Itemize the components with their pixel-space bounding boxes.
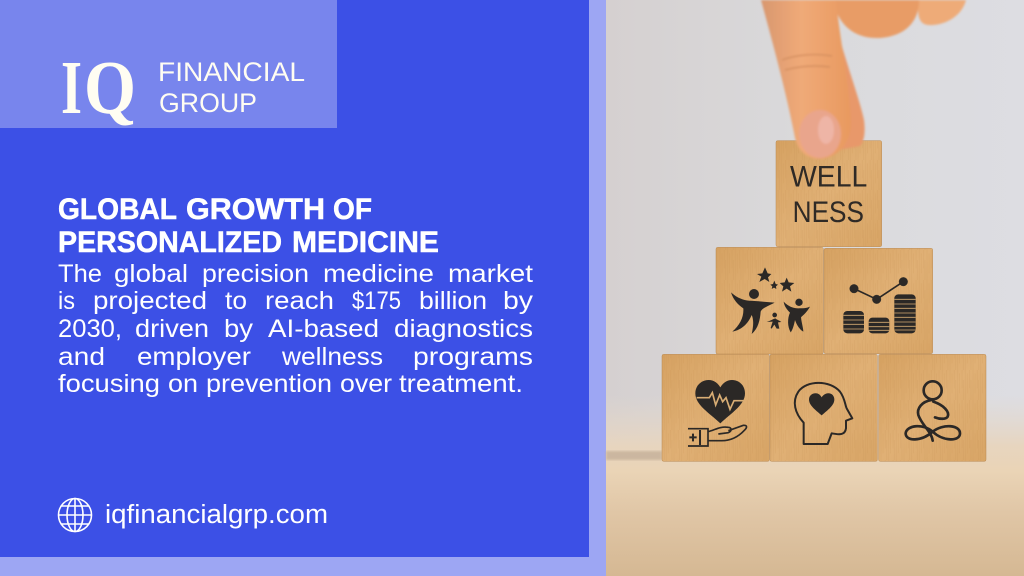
body text: projected xyxy=(93,287,207,315)
logo mark: IQ: I xyxy=(61,46,82,130)
block: meditation figure xyxy=(879,354,986,461)
bottom accent strip xyxy=(0,557,589,576)
body text: on xyxy=(168,370,198,398)
title: OF xyxy=(333,193,372,226)
body text: focusing xyxy=(58,370,160,398)
title: MEDICINE xyxy=(292,226,439,259)
body text xyxy=(58,260,534,398)
block shadow xyxy=(606,451,662,460)
logo mark: IQ xyxy=(61,46,136,130)
body text: by xyxy=(503,287,534,315)
title: PERSONALIZED xyxy=(58,226,282,259)
body text: to xyxy=(225,287,247,315)
logo wordmark: FINANCIAL xyxy=(158,57,305,87)
body text: precision xyxy=(202,260,309,288)
body text: AI-based xyxy=(268,315,379,343)
table surface xyxy=(606,395,1024,576)
photo: wooden wellness blocks xyxy=(606,0,1024,576)
body text: treatment. xyxy=(399,370,523,398)
body text: reach xyxy=(265,287,334,315)
body text: over xyxy=(340,370,392,398)
body text: and xyxy=(58,343,105,371)
body text: The xyxy=(58,260,102,288)
icon: globe xyxy=(58,498,92,532)
logo panel xyxy=(0,0,337,130)
block: heart in hand xyxy=(662,354,769,461)
block: chart and coins xyxy=(824,248,933,354)
title: GROWTH xyxy=(186,193,325,226)
block: head with heart xyxy=(770,354,877,461)
body text: global xyxy=(114,260,188,288)
block: wellness xyxy=(776,141,882,247)
photo backdrop xyxy=(606,0,1024,576)
block: family with stars xyxy=(716,247,823,354)
fingers xyxy=(761,0,966,159)
body text: programs xyxy=(413,343,533,371)
body text: diagnostics xyxy=(394,315,533,343)
logo wordmark: GROUP xyxy=(159,88,257,118)
body text: employer xyxy=(137,343,251,371)
title xyxy=(58,193,439,259)
body text: $175 xyxy=(352,287,401,315)
body text: by xyxy=(224,315,254,343)
body text: medicine xyxy=(323,260,434,288)
body text: prevention xyxy=(206,370,332,398)
panel: blue background xyxy=(0,0,589,557)
body text: 2030, xyxy=(58,315,122,343)
body text: wellness xyxy=(281,343,383,371)
body text: billion xyxy=(419,287,487,315)
block: wellness: WELL xyxy=(790,161,867,194)
website url: iqfinancialgrp.com xyxy=(105,501,328,529)
vertical accent strip xyxy=(589,0,606,576)
block: wellness: NESS xyxy=(793,196,864,229)
wooden blocks and icons xyxy=(662,141,986,461)
logo mark: IQ: Q xyxy=(84,46,136,130)
body text: market xyxy=(448,260,533,288)
logo wordmark xyxy=(158,57,305,118)
body text: driven xyxy=(135,315,209,343)
body text: is xyxy=(58,287,75,315)
title: GLOBAL xyxy=(58,193,177,226)
